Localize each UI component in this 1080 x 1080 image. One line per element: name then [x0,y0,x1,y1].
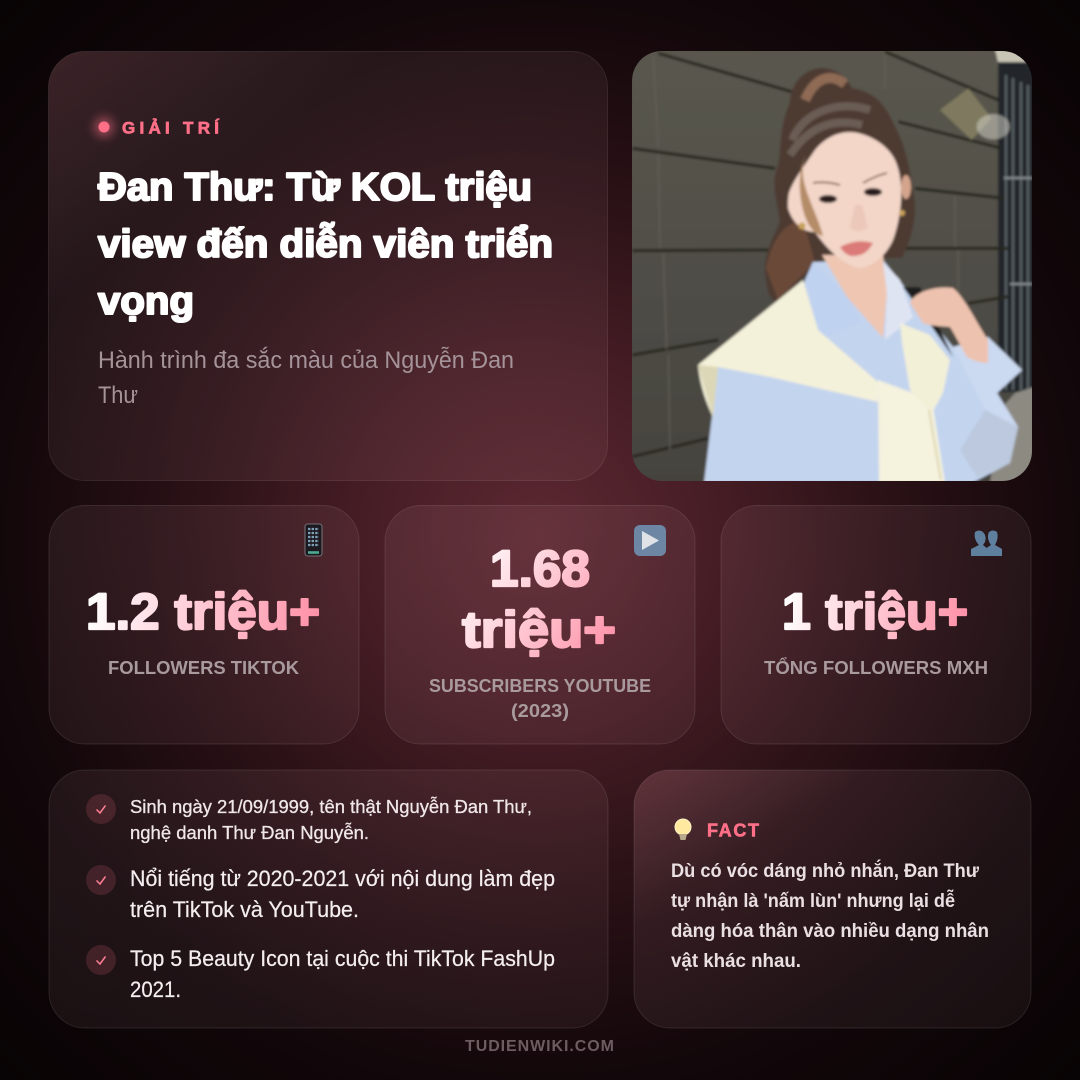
fact text [671,860,989,972]
shirt [704,260,1022,483]
stat value: 1 triệu+ [782,583,968,640]
fact text: dàng hóa thân vào nhiều dạng nhân [671,921,989,942]
list item 3 [86,945,555,1002]
stat value: 1.68 [490,540,590,597]
list item 1: Sinh ngày 21/09/1999, tên thật Nguyễn Đan Thư, [130,796,532,817]
earrings [798,222,806,230]
portrait photo [630,49,1034,483]
hand [910,287,988,363]
subtitle: Hành trình đa sắc màu của Nguyễn Đan [98,347,514,374]
eyes [819,195,837,203]
list item 1: nghệ danh Thư Đan Nguyễn. [130,822,369,843]
list item 2 [86,865,555,922]
panel: stat total followers [721,506,1031,744]
subtitle: Thư [98,382,138,409]
fact text: tự nhận là 'nấm lùn' nhưng lại dễ [671,890,955,912]
list item 3: Top 5 Beauty Icon tại cuộc thi TikTok FashUp [130,946,555,971]
hair [765,68,915,302]
bag strap [903,287,953,357]
collar [804,268,810,279]
title: view đến diễn viên triển [98,222,553,266]
icon: light bulb [675,819,691,840]
panel: stat YouTube [385,506,695,744]
stat value: 1.2 triệu+ [86,583,320,640]
fact heading: FACT [707,820,759,840]
panel: stat TikTok [49,506,359,744]
title: vọng [98,280,194,323]
list item 2: trên TikTok và YouTube. [130,897,359,922]
stat label [429,676,651,721]
panel: key points list [49,770,608,1028]
lips [840,241,873,256]
sweater strand [878,380,945,483]
face [788,132,901,268]
subtitle [98,347,514,409]
icon: phone [305,524,322,556]
sweater drape [698,280,878,417]
stat label: (2023) [511,701,569,721]
stat value: triệu+ [462,601,616,658]
stat label: TỔNG FOLLOWERS MXH [764,657,988,678]
fact text: vật khác nhau. [671,951,801,972]
icon: play button [634,525,666,556]
title [98,166,553,323]
title: Đan Thư: Từ KOL triệu [98,166,532,209]
stat label: FOLLOWERS TIKTOK [108,658,299,678]
stat value [462,540,616,658]
list item 2: Nổi tiếng từ 2020-2021 với nội dung làm đẹp [130,866,555,891]
neck and chest [822,255,887,338]
fact text: Dù có vóc dáng nhỏ nhắn, Đan Thư [671,860,979,882]
panel: fact card [634,770,1031,1028]
list item 3: 2021. [130,977,181,1002]
stat label: SUBSCRIBERS YOUTUBE [429,676,651,696]
panel: hero title card [48,52,608,480]
icon: two silhouettes [971,530,1002,556]
category tag: GIẢI TRÍ [122,118,220,138]
footer source: TUDIENWIKI.COM [465,1038,614,1055]
list item 1 [86,794,532,843]
